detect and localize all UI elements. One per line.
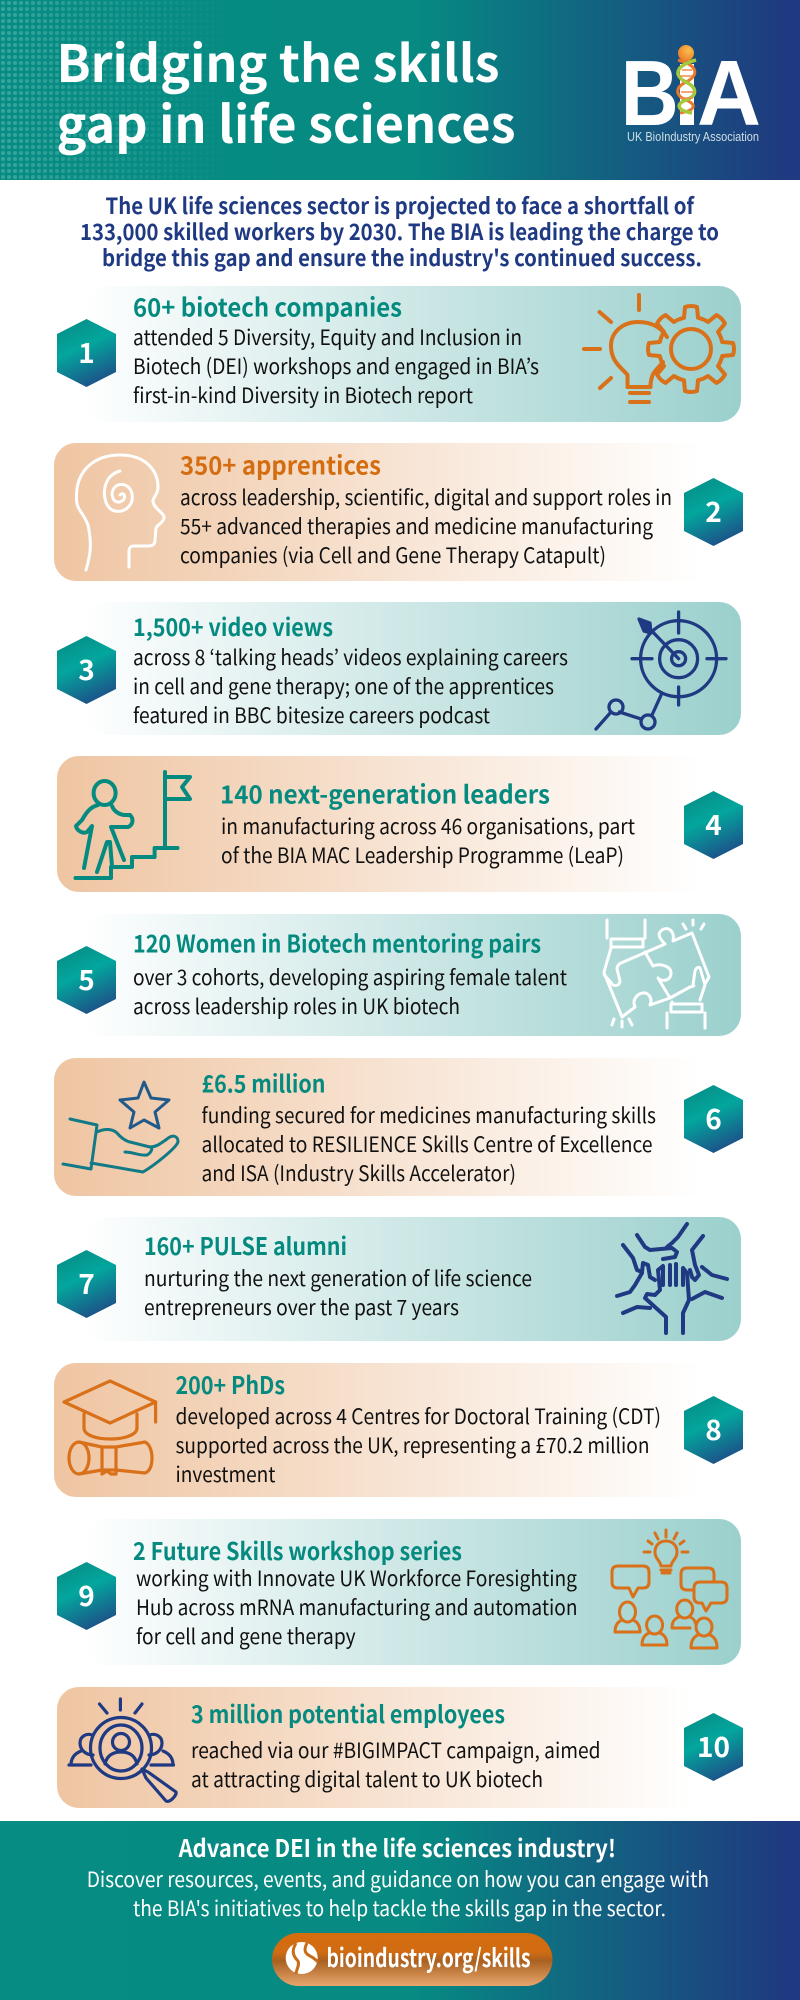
panel: 350+ apprentices: [54, 443, 743, 581]
body text: in cell and gene therapy; one of the apprentices: [133, 671, 554, 701]
body text: [133, 642, 568, 730]
link button: [272, 1933, 552, 1986]
panel: 120 Women in Biotech mentoring pairs: [57, 914, 741, 1036]
number badge 2: [684, 478, 743, 546]
number badge 6: [684, 1085, 743, 1153]
number badge 3: 3: [78, 649, 95, 689]
number badge 9: 9: [78, 1575, 95, 1615]
body text: nurturing the next generation of life science: [144, 1263, 532, 1293]
BIA logo: A: [697, 41, 761, 145]
number badge 8: 8: [705, 1409, 722, 1449]
heading: 140 next-generation leaders: [220, 776, 550, 812]
body text: featured in BBC bitesize careers podcast: [133, 700, 490, 730]
icon: hand holding star: [63, 1082, 178, 1172]
body text: for cell and gene therapy: [136, 1621, 356, 1651]
heading: 350+ apprentices: [180, 446, 381, 482]
body text: of the BIA MAC Leadership Programme (LeaP): [221, 840, 624, 870]
number badge 1: 1: [78, 332, 95, 372]
title: [56, 23, 516, 158]
body text: investment: [176, 1459, 276, 1489]
body text: entrepreneurs over the past 7 years: [144, 1292, 459, 1322]
panel: 60+ biotech companies: [57, 286, 741, 422]
number badge 2: 2: [705, 491, 722, 531]
number badge 3: [57, 636, 116, 704]
BIA logo: [621, 41, 761, 145]
number badge 7: [57, 1250, 116, 1318]
icon: target and chart: [596, 612, 726, 729]
body text: 55+ advanced therapies and medicine manufacturing: [180, 511, 653, 541]
panel: £6.5 million: [54, 1058, 743, 1196]
body text: Biotech (DEI) workshops and engaged in BIA’s: [133, 351, 539, 381]
heading: 200+ PhDs: [176, 1366, 285, 1401]
heading: 160+ PULSE alumni: [144, 1227, 347, 1262]
body text: [144, 1263, 532, 1322]
icon: globe: [286, 1942, 318, 1974]
panel: 1,500+ video views: [57, 602, 741, 735]
footer heading: Advance DEI in the life sciences industry!: [178, 1829, 616, 1864]
body text: and ISA (Industry Skills Accelerator): [202, 1158, 516, 1188]
body text: first-in-kind Diversity in Biotech report: [133, 380, 473, 410]
icon: hands joined together: [617, 1224, 727, 1333]
body text: working with Innovate UK Workforce Foresighting: [136, 1563, 577, 1593]
number badge 5: [57, 946, 116, 1014]
body text: supported across the UK, representing a £70.2 million: [176, 1430, 650, 1460]
body text: [133, 962, 567, 1021]
body text: [136, 1563, 578, 1651]
icon: magnifier over people: [69, 1699, 176, 1801]
number badge 10: [684, 1713, 743, 1781]
number badge 5: 5: [78, 959, 95, 999]
heading: 1,500+ video views: [133, 608, 333, 643]
footer text: the BIA's initiatives to help tackle the skills gap in the sector.: [133, 1893, 666, 1923]
BIA logo: B: [621, 41, 679, 145]
footer text: [87, 1864, 709, 1923]
panel: 140 next-generation leaders: [57, 756, 743, 892]
body text: over 3 cohorts, developing aspiring female talent: [133, 962, 567, 992]
header banner: [0, 0, 800, 180]
panel: 160+ PULSE alumni: [57, 1217, 741, 1341]
panel: 2 Future Skills workshop series: [57, 1519, 741, 1665]
body text: Hub across mRNA manufacturing and automation: [136, 1592, 578, 1622]
body text: in manufacturing across 46 organisations, part: [221, 811, 635, 841]
body text: at attracting digital talent to UK biotech: [191, 1764, 543, 1794]
number badge 8: [684, 1396, 743, 1464]
body text: across 8 ‘talking heads’ videos explaining careers: [133, 642, 568, 672]
intro text: The UK life sciences sector is projected to face a shortfall of: [106, 189, 695, 221]
body text: funding secured for medicines manufacturing skills: [202, 1100, 656, 1130]
heading: 120 Women in Biotech mentoring pairs: [133, 924, 541, 960]
number badge 9: [57, 1562, 116, 1630]
body text: [202, 1100, 656, 1188]
body text: [191, 1735, 600, 1794]
number badge 10: 10: [697, 1726, 730, 1766]
icon: people with speech bubbles and idea: [612, 1530, 727, 1648]
link text: bioindustry.org/skills: [326, 1939, 530, 1975]
number badge 7: 7: [78, 1263, 95, 1303]
intro text: bridge this gap and ensure the industry's continued success.: [102, 241, 702, 273]
body text: reached via our #BIGIMPACT campaign, aimed: [191, 1735, 600, 1765]
number badge 4: [684, 791, 743, 859]
heading: 2 Future Skills workshop series: [133, 1532, 462, 1567]
body text: attended 5 Diversity, Equity and Inclusion in: [133, 322, 522, 352]
number badge 6: 6: [705, 1098, 722, 1138]
icon: hands joining puzzle pieces: [604, 920, 709, 1028]
footer text: Discover resources, events, and guidance on how you can engage with: [87, 1864, 709, 1894]
BIA logo: UK BioIndustry Association: [627, 130, 759, 144]
body text: allocated to RESILIENCE Skills Centre of Excellence: [202, 1129, 652, 1159]
number badge 1: [57, 319, 116, 387]
panel: 200+ PhDs: [54, 1363, 743, 1497]
icon: person climbing steps to flag: [76, 772, 190, 878]
body text: [180, 482, 672, 570]
title: Bridging the skills: [56, 23, 500, 97]
heading: 60+ biotech companies: [133, 288, 402, 324]
heading: £6.5 million: [202, 1064, 326, 1100]
panel: 3 million potential employees: [57, 1687, 743, 1808]
title: gap in life sciences: [56, 84, 516, 158]
body text: [176, 1401, 661, 1489]
icon: head with spiral: [76, 455, 164, 570]
intro text: [80, 189, 719, 273]
footer band: [0, 1821, 800, 2000]
body text: [133, 322, 539, 410]
icon: graduation cap and scroll: [64, 1381, 156, 1474]
body text: companies (via Cell and Gene Therapy Catapult): [180, 540, 606, 570]
intro text: 133,000 skilled workers by 2030. The BIA is leading the charge to: [80, 215, 719, 247]
icon: lightbulb and gear: [584, 295, 734, 402]
number badge 4: 4: [705, 804, 722, 844]
body text: [221, 811, 635, 870]
body text: across leadership, scientific, digital and support roles in: [180, 482, 672, 512]
body text: across leadership roles in UK biotech: [133, 991, 460, 1021]
heading: 3 million potential employees: [191, 1695, 505, 1730]
body text: developed across 4 Centres for Doctoral Training (CDT): [176, 1401, 661, 1431]
